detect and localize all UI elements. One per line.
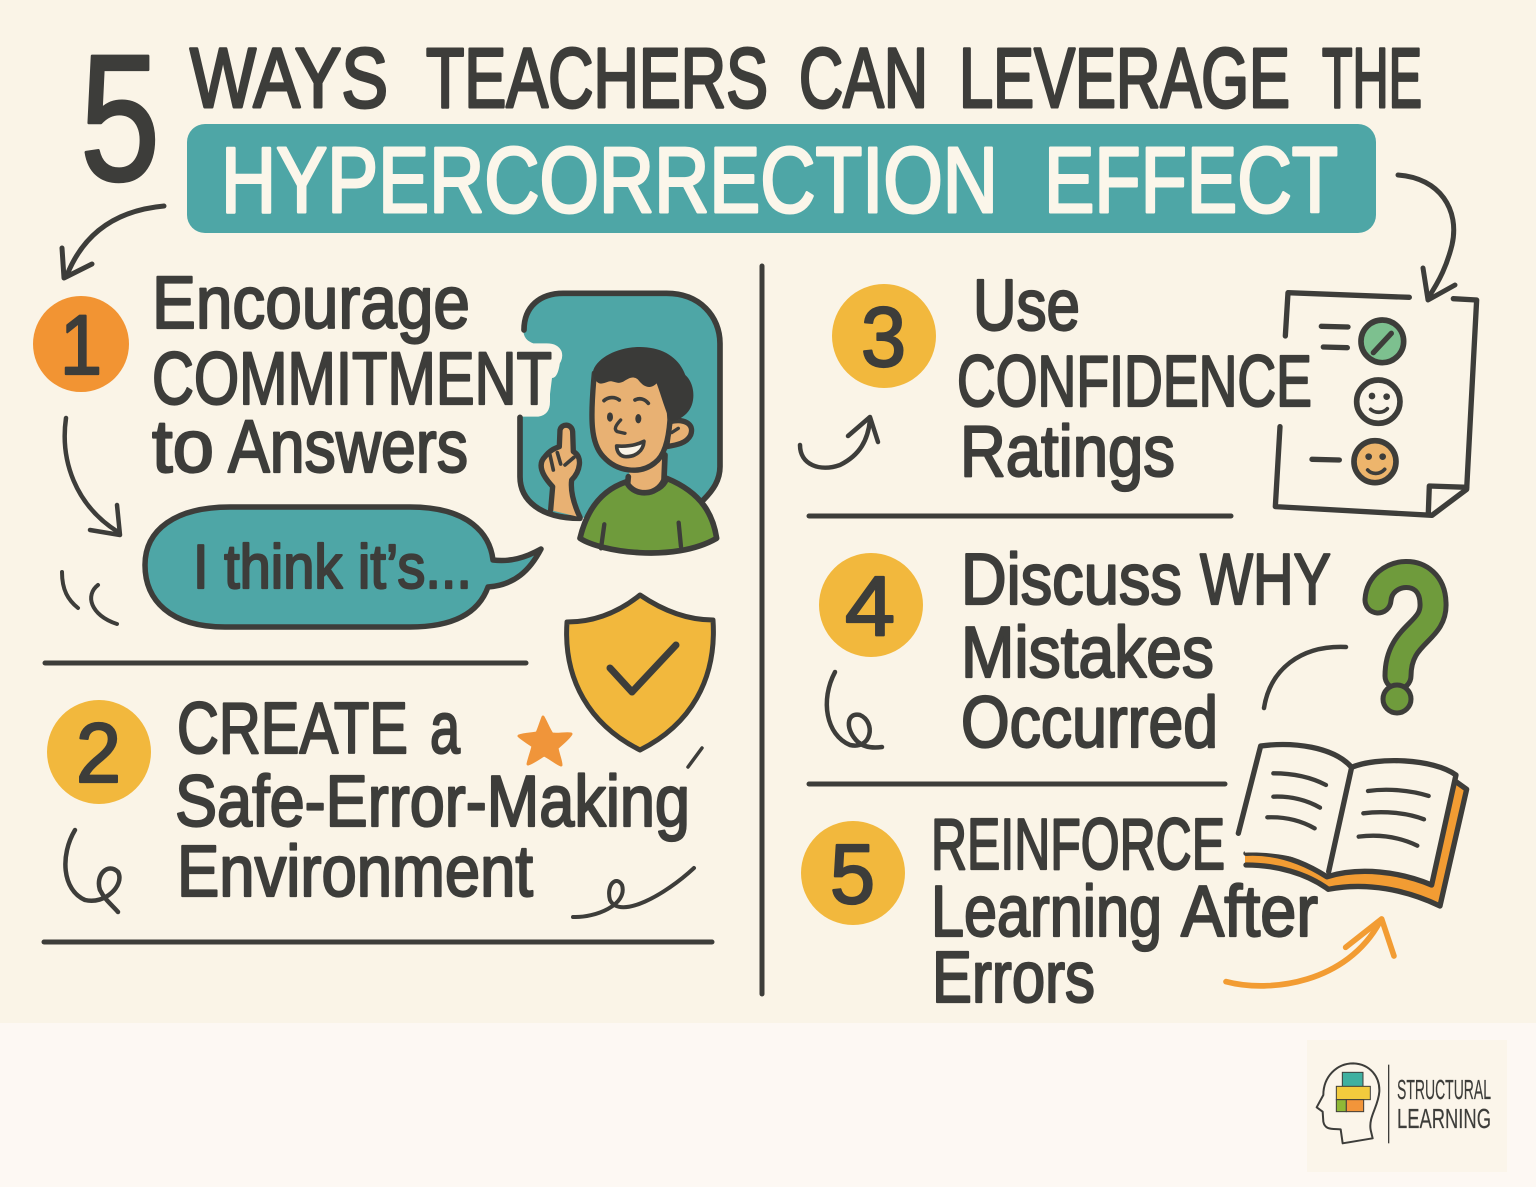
arrow: title to item 3	[1398, 175, 1455, 300]
title banner: hypercorrection effect: EFFECT	[1044, 128, 1338, 232]
decorative tick	[688, 748, 702, 767]
title: first line: THE	[1322, 31, 1422, 125]
head outline	[1317, 1063, 1379, 1143]
item 5 heading: REINFORCE	[931, 805, 1225, 885]
item 1 heading: to	[152, 405, 214, 488]
item 5 heading	[931, 805, 1318, 1018]
icon: shield with check	[567, 595, 713, 750]
eyes, brows, nose and mouth	[604, 398, 648, 457]
decorative loop: item 2	[65, 830, 119, 912]
pages	[1238, 745, 1456, 885]
item 1 heading: Encourage	[152, 261, 470, 344]
item 1 heading: COMMITMENT	[152, 337, 552, 420]
icon: open book	[1238, 745, 1467, 907]
panel outline	[520, 293, 720, 518]
raised hand	[541, 425, 580, 517]
hair	[593, 347, 693, 421]
item 2 heading: Safe-Error-Making	[175, 762, 690, 842]
item 4 badge: 4	[845, 559, 895, 653]
speech bubble: I think it’s...	[193, 533, 472, 602]
item 4 badge	[819, 553, 923, 657]
logo: Structural Learning: LEARNING	[1397, 1103, 1491, 1134]
rating row: green	[1321, 320, 1404, 363]
teal panel	[520, 293, 720, 518]
arrow: item 1 to speech bubble	[65, 418, 120, 535]
item 5 heading: Errors	[932, 938, 1095, 1018]
orange cover	[1245, 780, 1467, 907]
halo behind COMMITMENT	[500, 345, 560, 415]
decorative arc	[1264, 647, 1346, 708]
item 3 heading: CONFIDENCE	[957, 342, 1312, 422]
divider: item 2	[44, 940, 712, 944]
title: first line: LEVERAGE	[959, 31, 1290, 125]
divider: item 1	[45, 660, 526, 666]
icon: star	[519, 717, 571, 765]
item 3 heading: Use	[973, 266, 1080, 346]
sheet outline	[1275, 293, 1477, 515]
icon: question mark	[1378, 574, 1433, 713]
item 2 heading: CREATE	[177, 689, 408, 769]
speech bubble	[145, 507, 541, 627]
item 1 badge: 1	[60, 298, 102, 392]
logo: Structural Learning	[1307, 1040, 1507, 1172]
item 4 heading	[961, 540, 1331, 763]
title: first line: CAN	[799, 31, 928, 125]
neck	[628, 450, 665, 492]
item 1 heading: Answers	[228, 405, 468, 488]
item 3 badge: 3	[861, 290, 906, 384]
divider: item 3	[809, 514, 1231, 518]
rating row: orange smile	[1312, 441, 1396, 483]
title: first line	[190, 31, 1422, 125]
cover outline	[1246, 782, 1467, 906]
illustration: teacher in teal panel	[520, 293, 720, 553]
blocks	[1336, 1072, 1370, 1112]
item 4 heading: Mistakes	[961, 613, 1214, 693]
shirt	[580, 478, 717, 553]
logo divider	[1387, 1065, 1391, 1143]
item 5 heading: Learning	[931, 872, 1162, 952]
arrow: title to item 1	[62, 206, 164, 278]
item 5 badge	[801, 821, 905, 925]
decorative loop: item 4	[827, 672, 882, 747]
item 3 heading	[957, 266, 1312, 492]
item 3 heading: Ratings	[960, 412, 1175, 492]
title: number five: 5	[80, 18, 160, 219]
divider: item 4	[809, 782, 1225, 786]
item 1 heading	[152, 261, 552, 488]
item 2 heading: Environment	[177, 832, 533, 912]
item 2 heading: a	[430, 689, 461, 769]
decorative ticks	[62, 572, 117, 624]
rating row: neutral smile	[1357, 380, 1400, 423]
icon: confidence rating sheet	[1275, 293, 1477, 515]
item 4 heading: Discuss	[961, 540, 1182, 620]
arrow: item 3 decorative	[800, 417, 878, 468]
item 2 heading	[175, 689, 690, 912]
face	[592, 370, 670, 470]
item 3 badge	[832, 284, 936, 388]
title: first line: WAYS	[190, 31, 388, 125]
item 5 badge: 5	[830, 827, 875, 921]
shirt seams	[601, 523, 681, 548]
item 1 badge	[33, 296, 129, 392]
item 5 heading: After	[1181, 872, 1318, 952]
arrow: orange curved	[1226, 919, 1394, 986]
ear	[667, 421, 692, 447]
item 4 heading: Occurred	[961, 683, 1218, 763]
title: first line: TEACHERS	[426, 31, 768, 125]
item 2 badge: 2	[76, 706, 121, 800]
title banner: hypercorrection effect: HYPERCORRECTION	[221, 128, 998, 232]
decorative squiggle: item 2	[573, 868, 694, 917]
item 4 heading: WHY	[1200, 540, 1331, 620]
text lines	[1267, 773, 1429, 846]
center vertical divider	[760, 266, 764, 994]
item 2 badge	[47, 700, 151, 804]
